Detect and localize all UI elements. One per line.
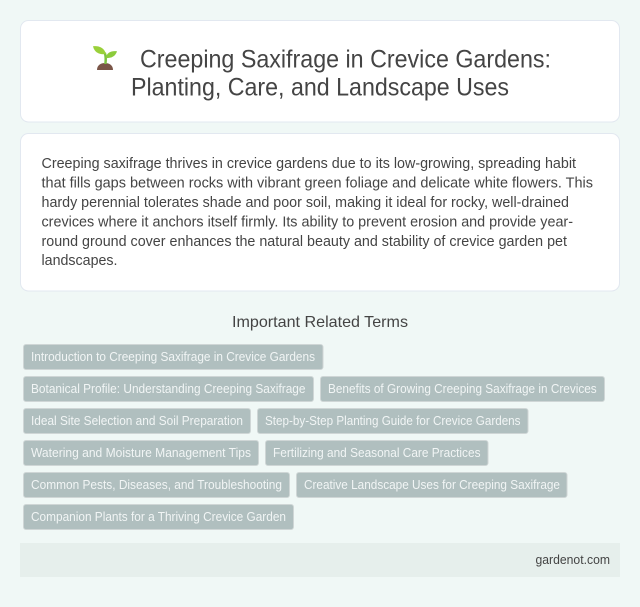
tag: landscape uses (296, 472, 567, 498)
tag: introduction (24, 344, 323, 370)
tag: fertilizing: Fertilizing and Seasonal Care Practices (273, 446, 480, 460)
panel: intro paragraph card (20, 134, 620, 291)
tag: planting guide (258, 408, 528, 434)
tag: botanical profile (24, 376, 314, 402)
heading: important related terms: Important Related Terms (232, 314, 408, 331)
tag list (24, 344, 604, 530)
tag: site selection: Ideal Site Selection and Soil Preparation (31, 414, 243, 428)
intro paragraph text (42, 155, 593, 269)
footer site name: gardenot.com (536, 552, 610, 567)
intro paragraph text: round ground cover enhances the natural beauty and stability of crevice garden pet (42, 233, 568, 250)
icon: sprout (93, 46, 117, 70)
tag: companion plants (24, 504, 294, 530)
intro paragraph text: crevices where it anchors itself firmly. Its ability to prevent erosion and provide year- (42, 214, 573, 230)
title: Planting, Care, and Landscape Uses (131, 74, 509, 102)
tag: planting guide: Step-by-Step Planting Guide for Crevice Gardens (265, 414, 520, 428)
tag: benefits (320, 376, 604, 402)
tag: watering (24, 440, 258, 466)
tag: botanical profile: Botanical Profile: Understanding Creeping Saxifrage (31, 382, 306, 396)
tag: watering: Watering and Moisture Management Tips (31, 446, 251, 460)
tag: pests: Common Pests, Diseases, and Troubleshooting (31, 478, 282, 492)
intro paragraph text: that fills gaps between rocks with vibrant green foliage and delicate white flowers. This (42, 174, 593, 192)
panel: title card (20, 20, 620, 122)
tag: introduction: Introduction to Creeping Saxifrage in Crevice Gardens (31, 350, 315, 364)
tag: companion plants: Companion Plants for a Thriving Crevice Garden (31, 510, 286, 524)
intro paragraph text: hardy perennial tolerates shade and poor soil, making it ideal for rocky, well-drained (42, 194, 569, 211)
title (131, 46, 551, 102)
tag: site selection (24, 408, 250, 434)
footer bar (20, 543, 620, 577)
tag: landscape uses: Creative Landscape Uses for Creeping Saxifrage (304, 478, 560, 492)
tag: fertilizing (266, 440, 488, 466)
tag: benefits: Benefits of Growing Creeping Saxifrage in Crevices (328, 382, 597, 396)
intro paragraph text: Creeping saxifrage thrives in crevice gardens due to its low-growing, spreading habit (42, 155, 577, 172)
intro paragraph text: landscapes. (42, 252, 118, 269)
title: Creeping Saxifrage in Crevice Gardens: (140, 46, 551, 74)
tag: pests (24, 472, 290, 498)
